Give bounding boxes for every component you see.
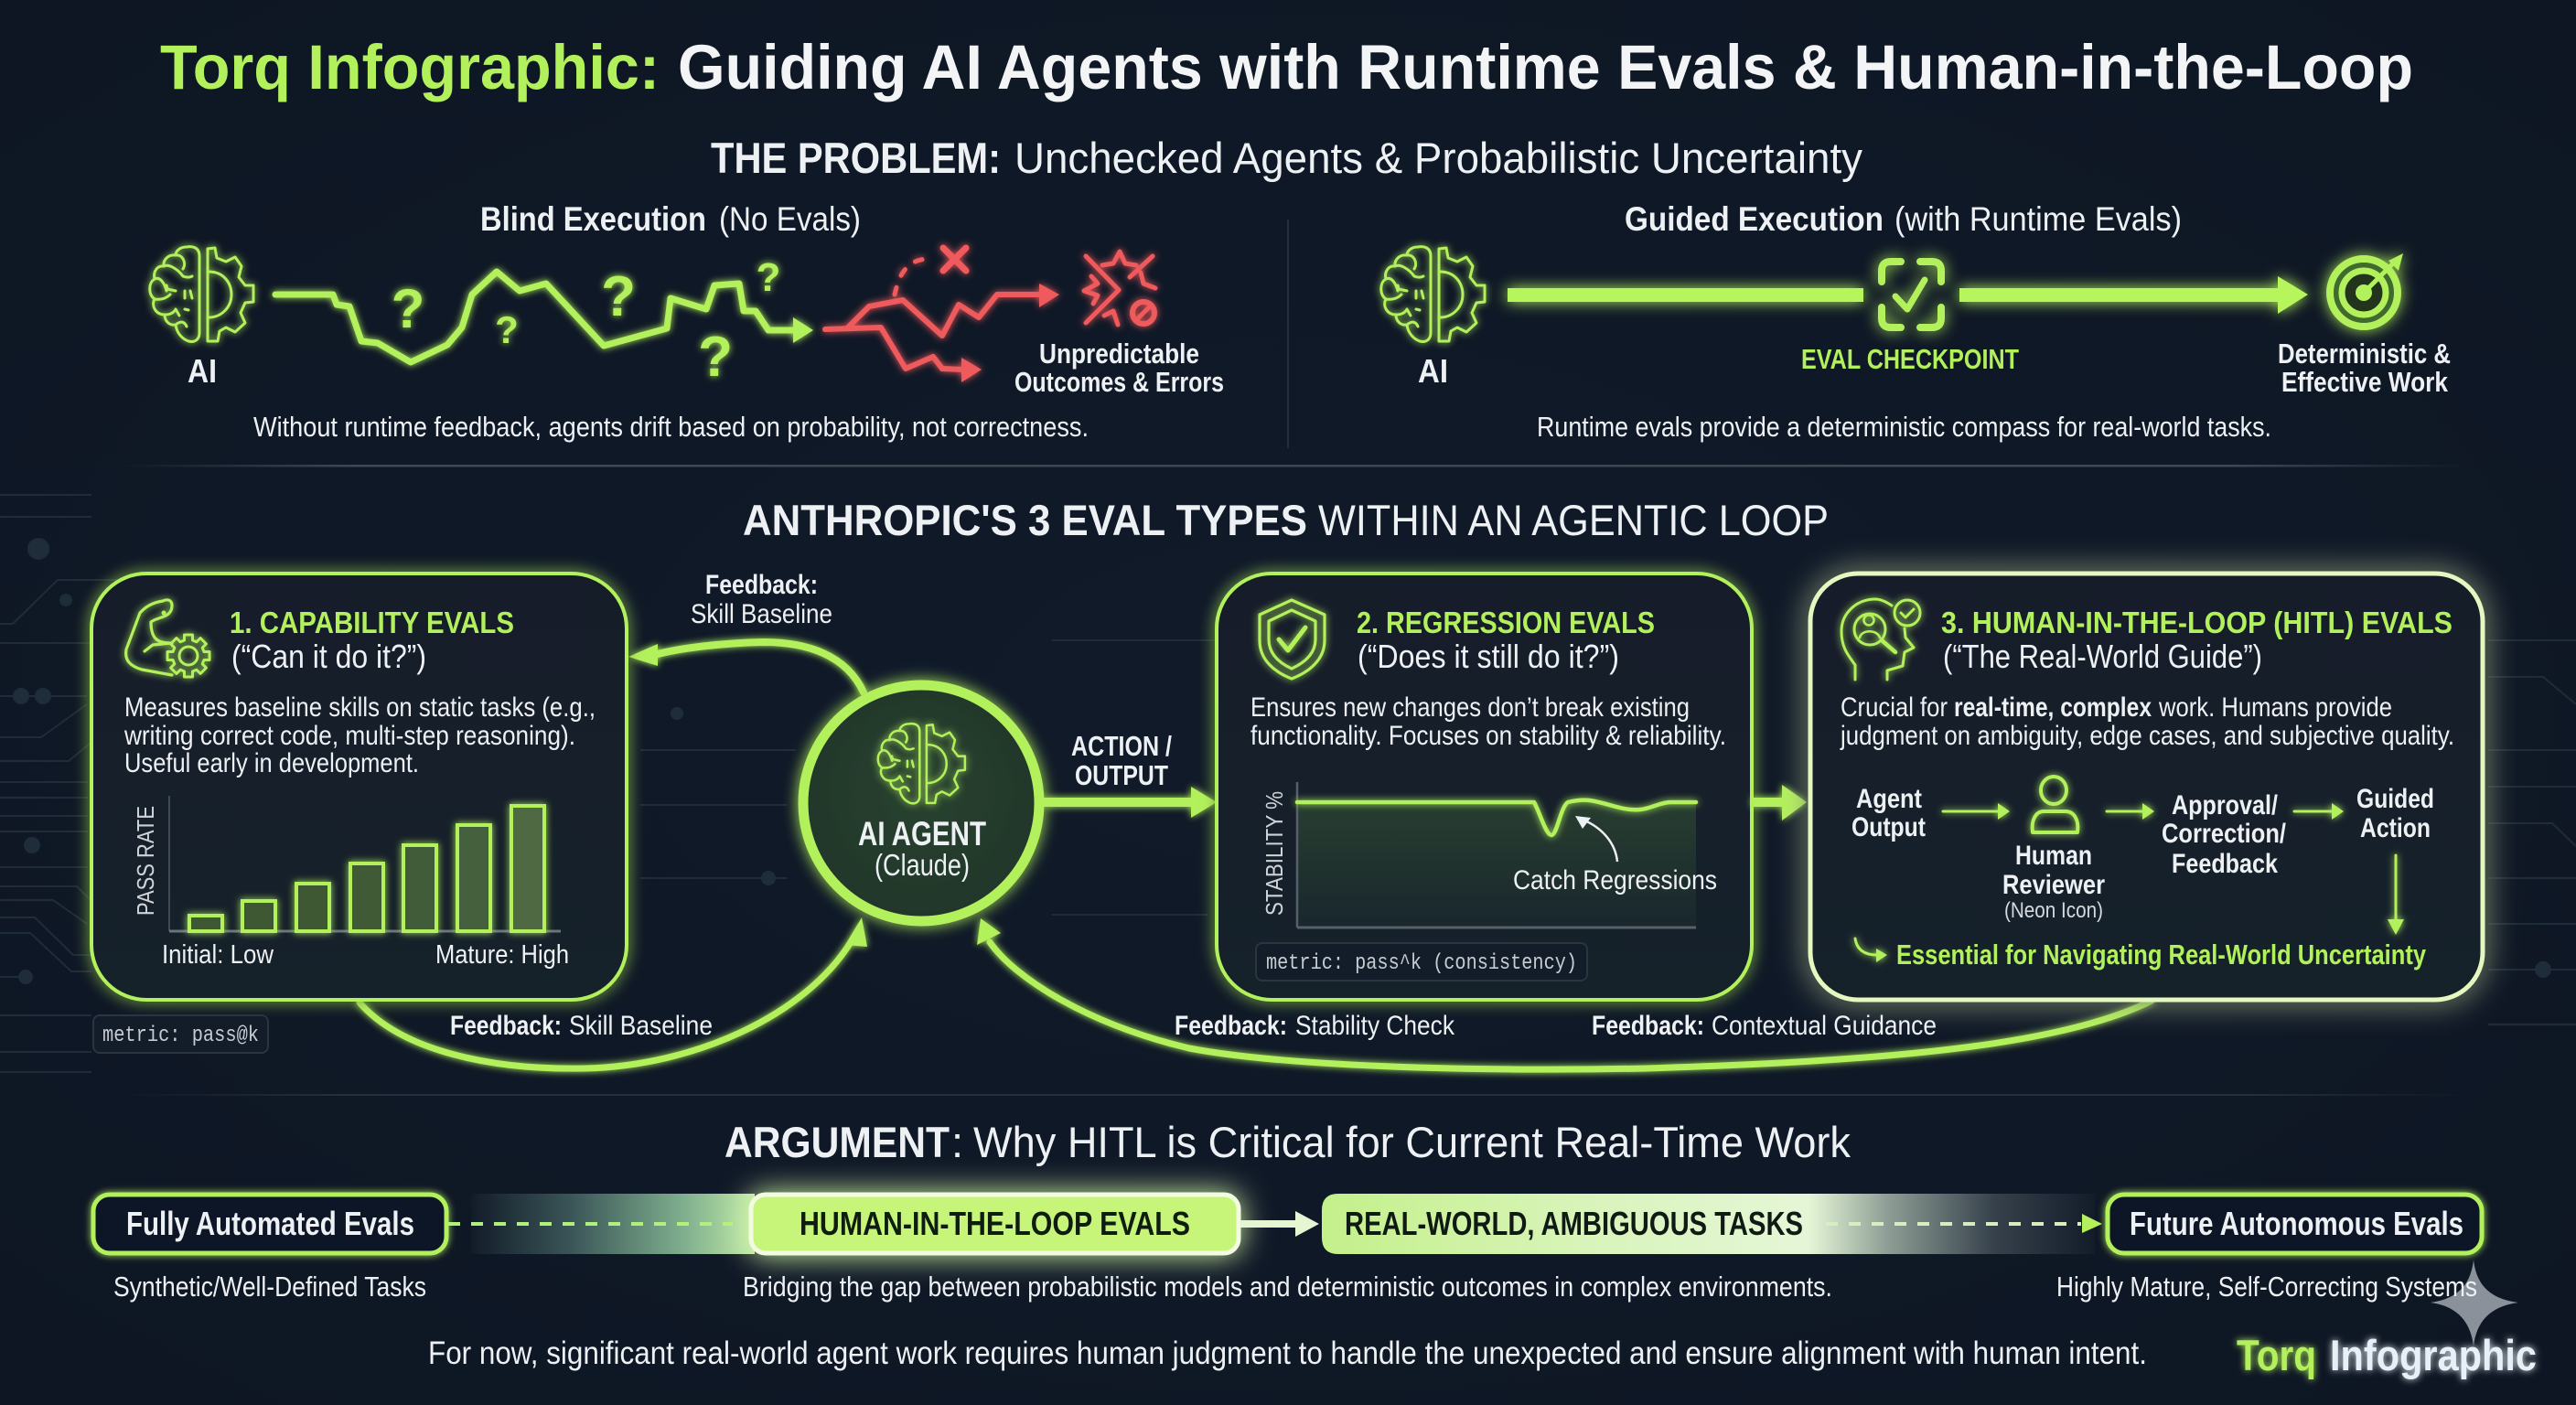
bar chart: pass rate: [132, 796, 569, 970]
metric tag: pass@k: metric: pass@k: [102, 1024, 259, 1048]
heading: capability: (“Can it do it?”): [231, 638, 426, 675]
box: future autonomous evals: [2108, 1195, 2482, 1253]
watermark sparkle: [2431, 1260, 2518, 1346]
label: unpredictable outcomes: [1014, 338, 1224, 398]
flow: approval: [2162, 790, 2287, 879]
heading: HITL: [1941, 606, 2453, 675]
question marks: [392, 255, 780, 389]
icon: brain: [878, 724, 965, 803]
label: feedback skill baseline top: Feedback:: [705, 570, 818, 600]
label: catch regressions: Catch Regressions: [1513, 865, 1717, 896]
label: feedback skill baseline bottom: Feedback:: [450, 1011, 562, 1041]
label: AI: AI: [1418, 352, 1448, 390]
caption: blind execution: Without runtime feedback, agents drift based on probability, not correctness.: [253, 411, 1089, 443]
panel frame: [91, 574, 627, 1000]
heading: blind execution: [480, 200, 861, 238]
watermark: [2237, 1331, 2537, 1379]
box: fully automated evals: Fully Automated Evals: [126, 1205, 414, 1242]
heading: argument: Why HITL is Critical for Current Real-Time Work: [973, 1118, 1851, 1166]
description: [123, 692, 596, 778]
captions: Highly Mature, Self-Correcting Systems: [2056, 1271, 2477, 1303]
label: feedback contextual guidance: Feedback:: [1592, 1011, 1704, 1041]
icon: AI brain: [1381, 247, 1485, 341]
heading: capability: [230, 606, 514, 675]
arrow: catch regressions: [1575, 816, 1617, 862]
flow: human reviewer: Human: [2015, 841, 2092, 871]
heading: regression: (“Does it still do it?”): [1358, 638, 1619, 675]
heading: guided execution: (with Runtime Evals): [1894, 200, 2182, 238]
flow: human reviewer: (Neon Icon): [2004, 898, 2103, 923]
description: Measures baseline skills on static tasks (e.g.,: [124, 692, 596, 723]
icon: error burst: [1084, 252, 1155, 325]
box: HITL evals: HUMAN-IN-THE-LOOP EVALS: [800, 1205, 1190, 1242]
question marks: ?: [757, 255, 780, 300]
flow: approval: Approval/: [2172, 790, 2279, 820]
stability line: [1297, 800, 1696, 835]
dashed connector: [1826, 1222, 2081, 1226]
panel: guided execution: [1381, 200, 2451, 443]
question marks: ?: [601, 265, 636, 328]
description: Ensures new changes don’t break existing: [1250, 692, 1690, 723]
heading: HITL: (“The Real-World Guide”): [1943, 638, 2262, 675]
node: AI agent: (Claude): [875, 848, 970, 882]
node: AI agent: [803, 685, 1039, 921]
heading: eval types: WITHIN AN AGENTIC LOOP: [1318, 496, 1829, 544]
band: real-world tasks: [1322, 1194, 2095, 1254]
title: Torq Infographic:: [160, 32, 660, 102]
flow: approval: Feedback: [2172, 849, 2278, 879]
icon: eval checkpoint: [1882, 262, 1941, 327]
arrow: feedback to panel 1: [628, 642, 864, 692]
panel: HITL evals: [1810, 574, 2483, 1000]
flow: human reviewer: Reviewer: [2002, 870, 2105, 900]
heading: capability: 1. CAPABILITY EVALS: [230, 606, 514, 639]
heading: the problem: Unchecked Agents & Probabilistic Uncertainty: [1014, 134, 1862, 182]
description: [1250, 692, 1726, 751]
flow: guided action: [2356, 784, 2434, 843]
flow: agent output: [1852, 784, 1926, 842]
line chart: stability: [1261, 782, 1717, 928]
label: feedback stability check: [1175, 1011, 1455, 1041]
arrow: panel 2 to panel 3: [1752, 785, 1807, 820]
icon: target: [2330, 253, 2403, 327]
caption: guided execution: Runtime evals provide a deterministic compass for real-world tasks.: [1537, 411, 2271, 443]
arrow: drifting path: [275, 272, 813, 362]
arrow: diverging red paths: [825, 248, 1059, 382]
metric tag: pass^k: metric: pass^k (consistency): [1266, 951, 1577, 976]
label: AI: AI: [188, 352, 217, 390]
arrow: flow 2: [2107, 803, 2154, 820]
chart labels: Initial: Low: [162, 940, 274, 970]
arrow: panel 3 feedback to agent: [977, 918, 2152, 1069]
panel frame: [1810, 574, 2483, 1000]
icon: head with magnifier: [1841, 599, 1920, 680]
heading: eval types: ANTHROPIC'S 3 EVAL TYPES: [743, 496, 1307, 544]
label: feedback contextual guidance: Contextual Guidance: [1712, 1011, 1937, 1041]
dashed connector: [448, 1222, 733, 1226]
question marks: ?: [698, 326, 733, 389]
label: feedback stability check: Stability Check: [1295, 1011, 1455, 1041]
description: writing correct code, multi-step reasoning).: [123, 721, 575, 751]
band: fade to HITL: [471, 1194, 755, 1254]
panel frame: [1217, 574, 1752, 1000]
label: unpredictable outcomes: Unpredictable: [1039, 338, 1199, 370]
arrow: flow 3: [2294, 803, 2344, 820]
flow: agent output: Agent: [1856, 784, 1922, 814]
watermark: Torq: [2237, 1331, 2316, 1379]
question marks: ?: [495, 308, 519, 351]
description: Crucial for: [1841, 692, 1948, 723]
arrow: flow 1: [1943, 803, 2010, 820]
icon: arm and gear: [126, 600, 209, 677]
arrow: panel 1 feedback to agent: [360, 917, 867, 1068]
description: judgment on ambiguity, edge cases, and subjective quality.: [1840, 721, 2454, 751]
heading: blind execution: Blind Execution: [480, 200, 706, 238]
label: deterministic work: Deterministic &: [2278, 338, 2451, 370]
arrow: down: [2388, 855, 2404, 935]
description: real-time, complex: [1954, 692, 2152, 723]
description: [1840, 692, 2454, 751]
arrow: HITL to real-world: [1240, 1211, 1319, 1237]
icon: human reviewer: [2033, 777, 2077, 832]
heading: regression: 2. REGRESSION EVALS: [1357, 606, 1655, 639]
label: unpredictable outcomes: Outcomes & Errors: [1014, 366, 1224, 398]
label: feedback skill baseline top: [691, 570, 832, 629]
spectrum: argument flow: [93, 1194, 2482, 1303]
description: work. Humans provide: [2158, 692, 2392, 723]
panel: regression evals: [1217, 574, 1752, 1000]
heading: HITL: 3. HUMAN-IN-THE-LOOP (HITL) EVALS: [1941, 606, 2453, 639]
flow: guided action: Guided: [2356, 784, 2434, 814]
question marks: ?: [392, 278, 424, 339]
arrow: small bent: [1855, 938, 1887, 962]
arrowhead: to future: [2082, 1214, 2102, 1233]
label: feedback skill baseline top: Skill Baseline: [691, 599, 832, 629]
axis label: STABILITY %: [1261, 791, 1288, 916]
bars: [189, 806, 544, 931]
divider: [1287, 220, 1289, 448]
title: Guiding AI Agents with Runtime Evals & Human-in-the-Loop: [678, 32, 2413, 102]
flow: agent output: Output: [1852, 812, 1926, 842]
bar chart: pass rate: Mature: High: [435, 940, 569, 970]
label: feedback stability check: Feedback:: [1175, 1011, 1287, 1041]
label: feedback contextual guidance: [1592, 1011, 1937, 1041]
label: feedback skill baseline bottom: Skill Baseline: [569, 1011, 713, 1041]
label: feedback skill baseline bottom: [450, 1011, 713, 1041]
label: AI agent: AI AGENT: [858, 815, 986, 853]
captions: [113, 1271, 2477, 1303]
box: fully automated evals: [93, 1195, 446, 1253]
divider: [119, 1094, 2470, 1096]
box: HITL evals: [751, 1195, 1239, 1253]
watermark: Infographic: [2330, 1331, 2537, 1379]
heading: regression: [1357, 606, 1655, 675]
band: real-world tasks: REAL-WORLD, AMBIGUOUS TASKS: [1345, 1205, 1803, 1242]
circuit background pattern: [0, 495, 2576, 1072]
heading: guided execution: Guided Execution: [1625, 200, 1884, 238]
panel: blind execution: [150, 200, 1224, 443]
flow: guided action: Action: [2360, 813, 2431, 843]
label: eval checkpoint: EVAL CHECKPOINT: [1801, 343, 2019, 375]
metric tag: pass^k: [1256, 943, 1587, 981]
captions: Bridging the gap between probabilistic models and deterministic outcomes in complex environments.: [743, 1271, 1832, 1303]
heading: argument: :: [951, 1118, 963, 1166]
label: deterministic work: Effective Work: [2281, 366, 2449, 398]
icon: shield: [1260, 600, 1325, 679]
heading: argument: ARGUMENT: [724, 1118, 950, 1166]
panel: capability evals: [91, 574, 627, 1000]
heading: eval types: [743, 496, 1829, 544]
conclusion: For now, significant real-world agent work requires human judgment to handle the unexpected and ensure alignment with human intent.: [428, 1335, 2147, 1371]
metric tag: pass@k: [93, 1015, 268, 1053]
captions: Synthetic/Well-Defined Tasks: [113, 1271, 426, 1303]
heading: guided execution: [1625, 200, 2182, 238]
heading: the problem: THE PROBLEM:: [711, 134, 1001, 182]
label: deterministic work: [2278, 338, 2451, 398]
label: action output: ACTION /: [1071, 730, 1172, 762]
arrow: guided path: [1508, 276, 2308, 314]
label: action output: OUTPUT: [1075, 759, 1168, 791]
description: functionality. Focuses on stability & reliability.: [1250, 721, 1726, 751]
label: action output: [1071, 730, 1172, 791]
flow: approval: Correction/: [2162, 819, 2287, 849]
icon: AI brain: [150, 247, 253, 341]
description: Useful early in development.: [124, 748, 419, 778]
divider: [119, 465, 2470, 467]
box: future autonomous evals: Future Autonomous Evals: [2130, 1205, 2463, 1242]
axis label: PASS RATE: [132, 806, 159, 916]
arrow: action output: [1044, 787, 1217, 818]
heading: blind execution: (No Evals): [719, 200, 861, 238]
flow: human reviewer: [2002, 841, 2105, 923]
callout: essential: Essential for Navigating Real-World Uncertainty: [1896, 938, 2427, 971]
